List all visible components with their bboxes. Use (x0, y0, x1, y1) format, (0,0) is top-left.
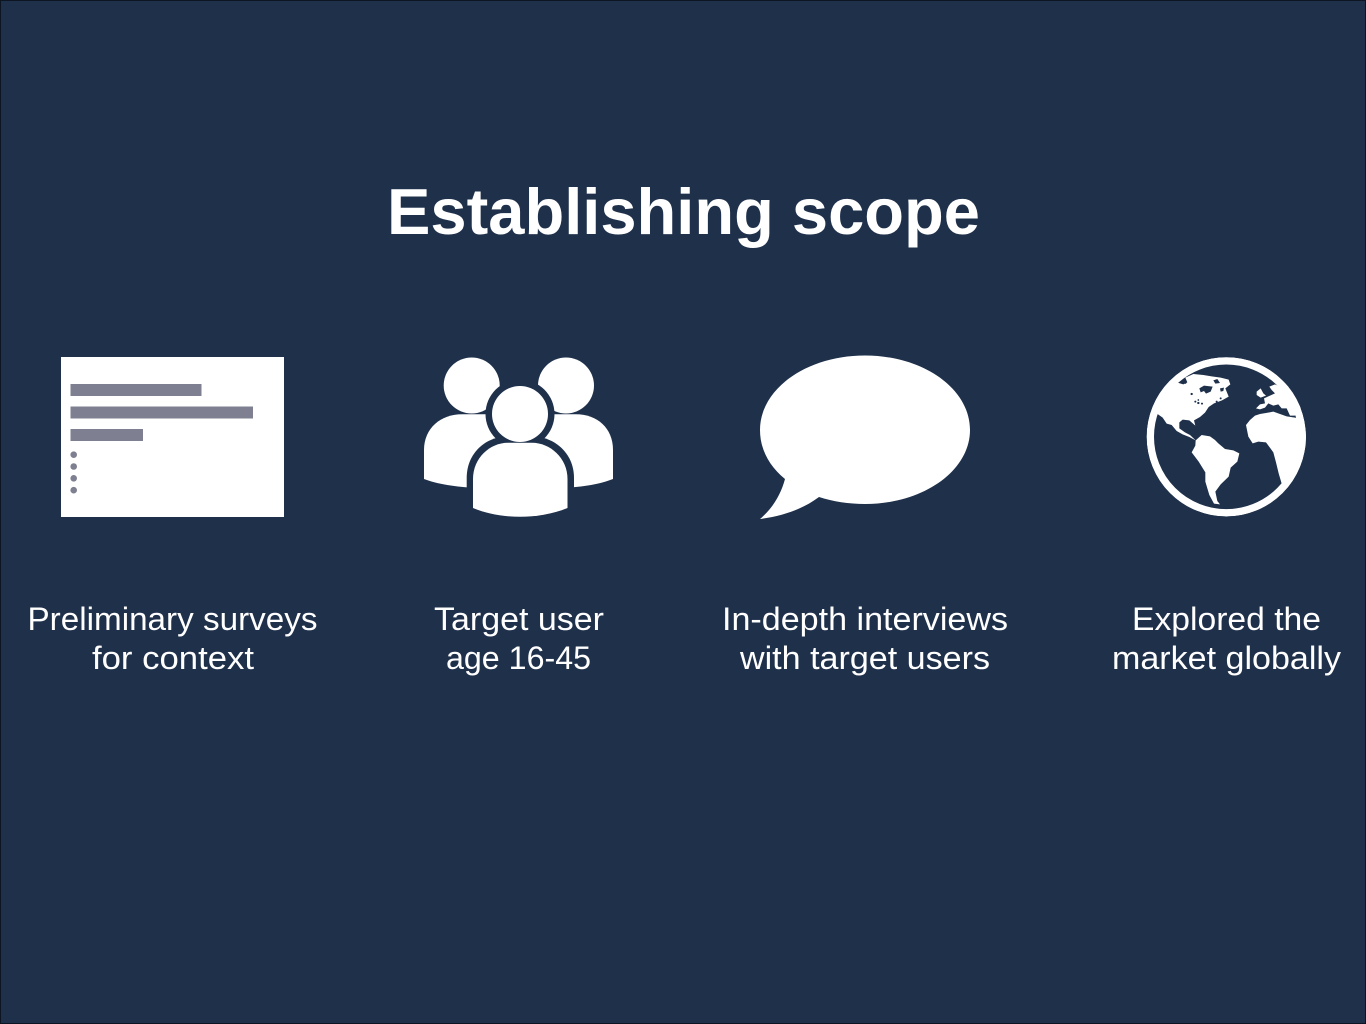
label: preliminary surveys: for context (92, 640, 254, 676)
label: in-depth interviews: with target users (739, 640, 990, 676)
column: in-depth interviews (722, 356, 1008, 676)
icon: survey chart (61, 357, 284, 517)
label: global market (1112, 601, 1341, 676)
label: target user (434, 601, 604, 676)
label: in-depth interviews: In-depth interviews (722, 601, 1008, 637)
icon: globe (1150, 361, 1308, 513)
label: preliminary surveys: Preliminary surveys (28, 601, 317, 637)
label: target user: Target user (434, 601, 604, 637)
column: preliminary surveys (28, 357, 317, 676)
label: global market: market globally (1112, 640, 1341, 676)
label: global market: Explored the (1132, 601, 1321, 637)
label: preliminary surveys (28, 601, 317, 676)
label: in-depth interviews (722, 601, 1008, 676)
icon: speech bubble (760, 356, 970, 519)
title: Establishing scope (387, 175, 980, 248)
column: target user (424, 358, 613, 676)
column: global market (1112, 361, 1341, 676)
icon: group of people (424, 358, 613, 517)
label: target user: age 16-45 (446, 640, 591, 676)
